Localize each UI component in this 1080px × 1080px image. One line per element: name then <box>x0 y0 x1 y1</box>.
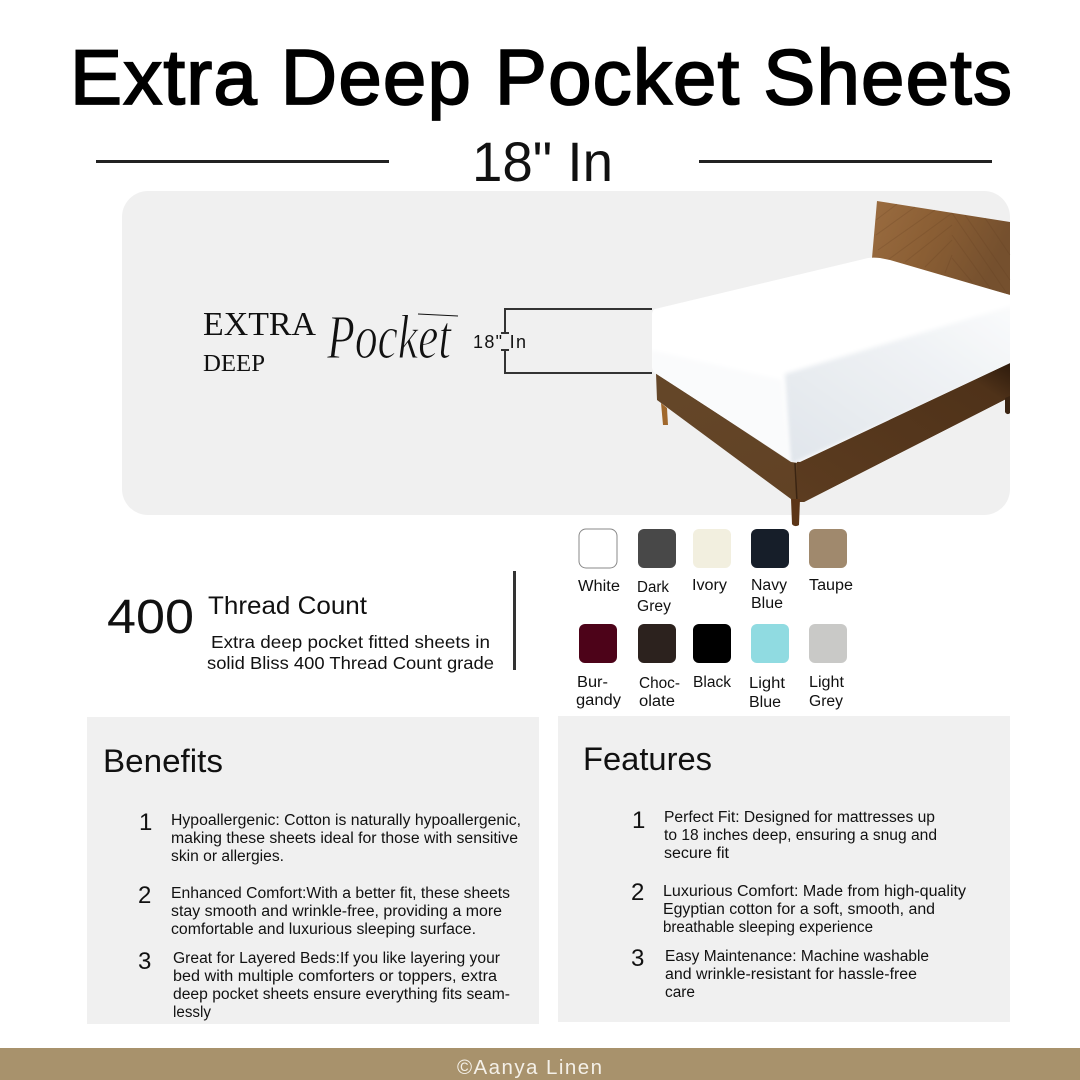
benefit 1 <box>139 809 521 865</box>
swatch: light blue <box>749 624 789 711</box>
swatch: chocolate <box>638 624 680 710</box>
swatch: dark grey: Dark <box>637 579 669 596</box>
subtitle with rules: 18" In <box>472 130 613 193</box>
benefit 2: stay smooth and wrinkle-free, providing a more <box>171 903 502 920</box>
benefit 2 <box>138 882 510 938</box>
label: extra deep pocket: EXTRA <box>203 306 316 343</box>
feature 3: 3 <box>631 945 644 972</box>
swatch: chocolate: Choc- <box>639 675 680 692</box>
swatch: navy blue <box>751 529 789 612</box>
benefit 1: 1 <box>139 809 152 836</box>
swatch: burgundy <box>576 624 621 709</box>
benefit 3: bed with multiple comforters or toppers, extra <box>173 968 497 985</box>
benefit 2: comfortable and luxurious sleeping surface. <box>171 921 476 938</box>
benefit 3: Great for Layered Beds:If you like layering your <box>173 950 500 967</box>
subtitle with rules <box>96 130 992 193</box>
swatch: ivory <box>692 529 731 594</box>
swatch: light blue: Light <box>749 675 786 692</box>
benefit 3: deep pocket sheets ensure everything fits seam- <box>173 986 510 1003</box>
feature 2: Egyptian cotton for a soft, smooth, and <box>663 901 935 918</box>
swatch: burgundy: gandy <box>576 692 621 709</box>
panel: benefits <box>87 717 539 1024</box>
panel: bed diagram <box>122 191 1015 526</box>
benefit 3: lessly <box>173 1004 211 1021</box>
bed legs <box>661 396 1010 526</box>
swatch: ivory: Ivory <box>692 577 727 594</box>
colour swatches <box>576 529 853 711</box>
swatch: burgundy: Bur- <box>577 674 608 691</box>
icon: bed with white fitted sheet <box>650 201 1015 526</box>
swatch: light grey: Light <box>809 674 845 691</box>
swatch: navy blue: Navy <box>751 577 787 594</box>
footer: ©Aanya Linen <box>457 1056 602 1079</box>
swatch: dark grey <box>637 529 676 615</box>
dimension bracket: 18 in <box>473 309 652 373</box>
feature 2: 2 <box>631 879 644 906</box>
title: Extra Deep Pocket Sheets <box>70 33 1012 121</box>
stat: 400 thread count: 400 <box>107 591 194 644</box>
feature 2 <box>631 879 966 936</box>
benefit 2: 2 <box>138 882 151 909</box>
benefit 1: Hypoallergenic: Cotton is naturally hypoallergenic, <box>171 812 521 829</box>
benefit 2: Enhanced Comfort:With a better fit, these sheets <box>171 885 510 902</box>
swatch: white <box>578 529 620 595</box>
swatch: navy blue: Blue <box>751 595 783 612</box>
swatch: taupe: Taupe <box>809 577 853 594</box>
label: extra deep pocket: DEEP <box>203 351 265 377</box>
heading: features: Features <box>583 741 712 777</box>
label: extra deep pocket: Pocket <box>326 304 452 372</box>
swatch: chocolate: olate <box>639 693 675 710</box>
swatch: light grey: Grey <box>809 693 843 710</box>
feature 2: breathable sleeping experience <box>663 919 873 936</box>
feature 3: care <box>665 984 695 1001</box>
feature 1: to 18 inches deep, ensuring a snug and <box>664 827 937 844</box>
stat: 400 thread count: solid Bliss 400 Thread Count grade <box>207 653 494 673</box>
swatch: taupe <box>809 529 853 594</box>
feature 1: 1 <box>632 807 645 834</box>
heading: benefits: Benefits <box>103 743 223 779</box>
feature 3 <box>631 945 929 1001</box>
feature 3: Easy Maintenance: Machine washable <box>665 948 929 965</box>
dimension bracket: 18 in: 18" In <box>473 332 526 352</box>
benefit 1: making these sheets ideal for those with sensitive <box>171 830 518 847</box>
stat: 400 thread count: Thread Count <box>208 592 367 620</box>
feature 2: Luxurious Comfort: Made from high-quality <box>663 883 966 900</box>
panel: features <box>558 716 1010 1022</box>
benefit 3: 3 <box>138 948 151 975</box>
stat: 400 thread count: Extra deep pocket fitted sheets in <box>211 632 490 652</box>
feature 3: and wrinkle-resistant for hassle-free <box>665 966 917 983</box>
label: extra deep pocket <box>203 304 458 377</box>
swatch: dark grey: Grey <box>637 598 671 615</box>
stat: 400 thread count <box>107 591 494 673</box>
swatch: light grey <box>809 624 847 710</box>
swatch: white: White <box>578 578 620 595</box>
feature 1: secure fit <box>664 845 730 862</box>
benefit 1: skin or allergies. <box>171 848 284 865</box>
swatch: black: Black <box>693 674 731 691</box>
benefit 3 <box>138 948 510 1021</box>
swatch: light blue: Blue <box>749 694 781 711</box>
swatch: black <box>693 624 731 691</box>
feature 1: Perfect Fit: Designed for mattresses up <box>664 809 935 826</box>
feature 1 <box>632 807 937 862</box>
footer <box>0 1048 1080 1080</box>
